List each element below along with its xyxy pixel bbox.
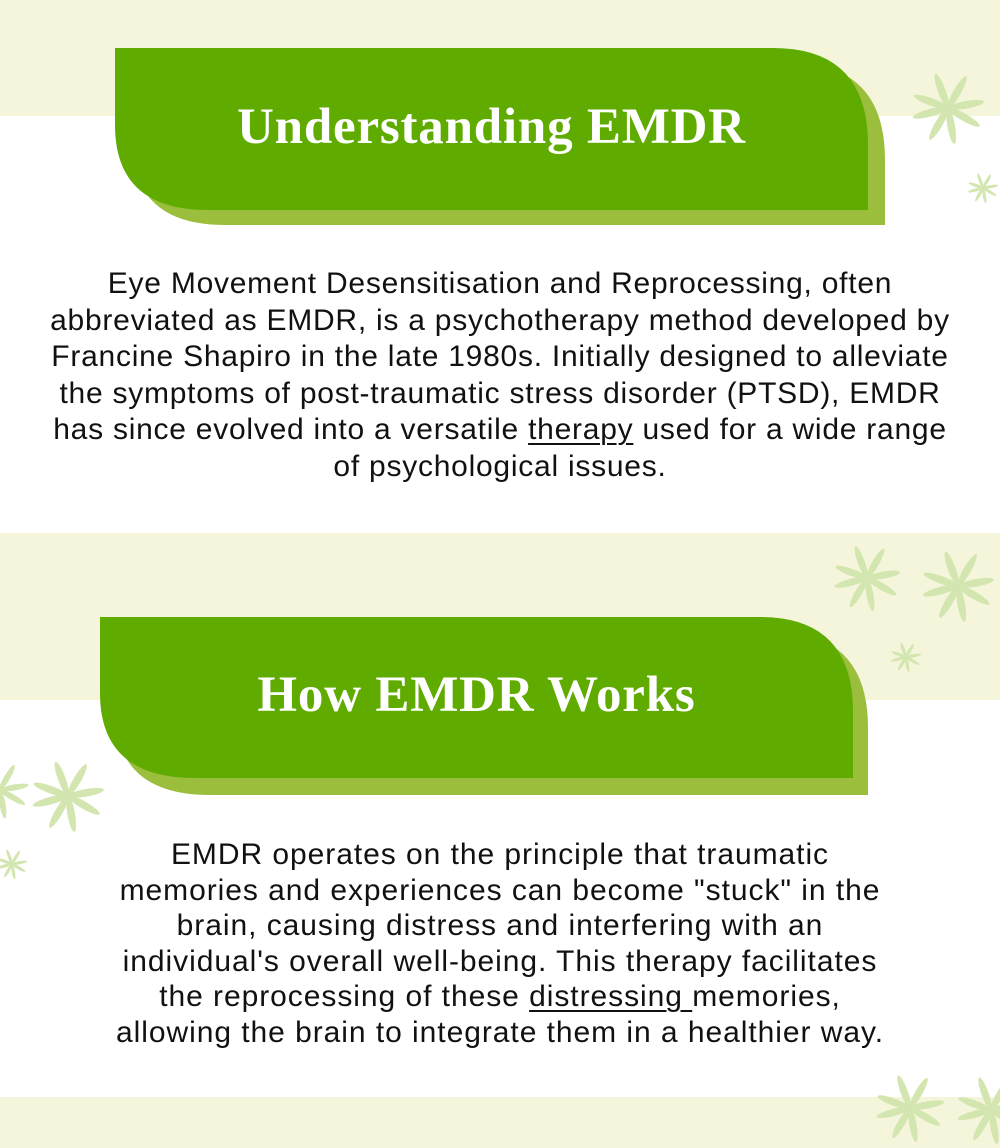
text block 2: EMDR operates on the principle that traumatic xyxy=(171,838,829,871)
text block 1: Eye Movement Desensitisation and Reprocessing, often xyxy=(108,267,892,300)
title 2: How EMDR Works xyxy=(257,667,696,723)
text block 1: Francine Shapiro in the late 1980s. Initially designed to alleviate xyxy=(51,340,949,373)
text block 2: memories and experiences can become "stuck" in the xyxy=(120,874,880,906)
title 1: Understanding EMDR xyxy=(237,99,746,155)
text block 1: abbreviated as EMDR, is a psychotherapy method developed by xyxy=(50,304,950,336)
text block 2 xyxy=(116,838,884,1048)
text block 1: has since evolved into a versatile therapy used for a wide range xyxy=(53,413,947,446)
text block 2: brain, causing distress and interfering with an xyxy=(177,909,823,942)
text block 1 xyxy=(50,267,950,482)
text block 2: allowing the brain to integrate them in a healthier way. xyxy=(116,1016,884,1048)
banner 2 xyxy=(100,617,868,795)
text block 1: the symptoms of post-traumatic stress disorder (PTSD), EMDR xyxy=(59,376,941,410)
text block 1: of psychological issues. xyxy=(333,450,667,482)
text block 2: the reprocessing of these distressing memories, xyxy=(159,980,841,1013)
text block 2: individual's overall well-being. This therapy facilitates xyxy=(123,944,877,978)
banner 1 xyxy=(115,48,885,225)
